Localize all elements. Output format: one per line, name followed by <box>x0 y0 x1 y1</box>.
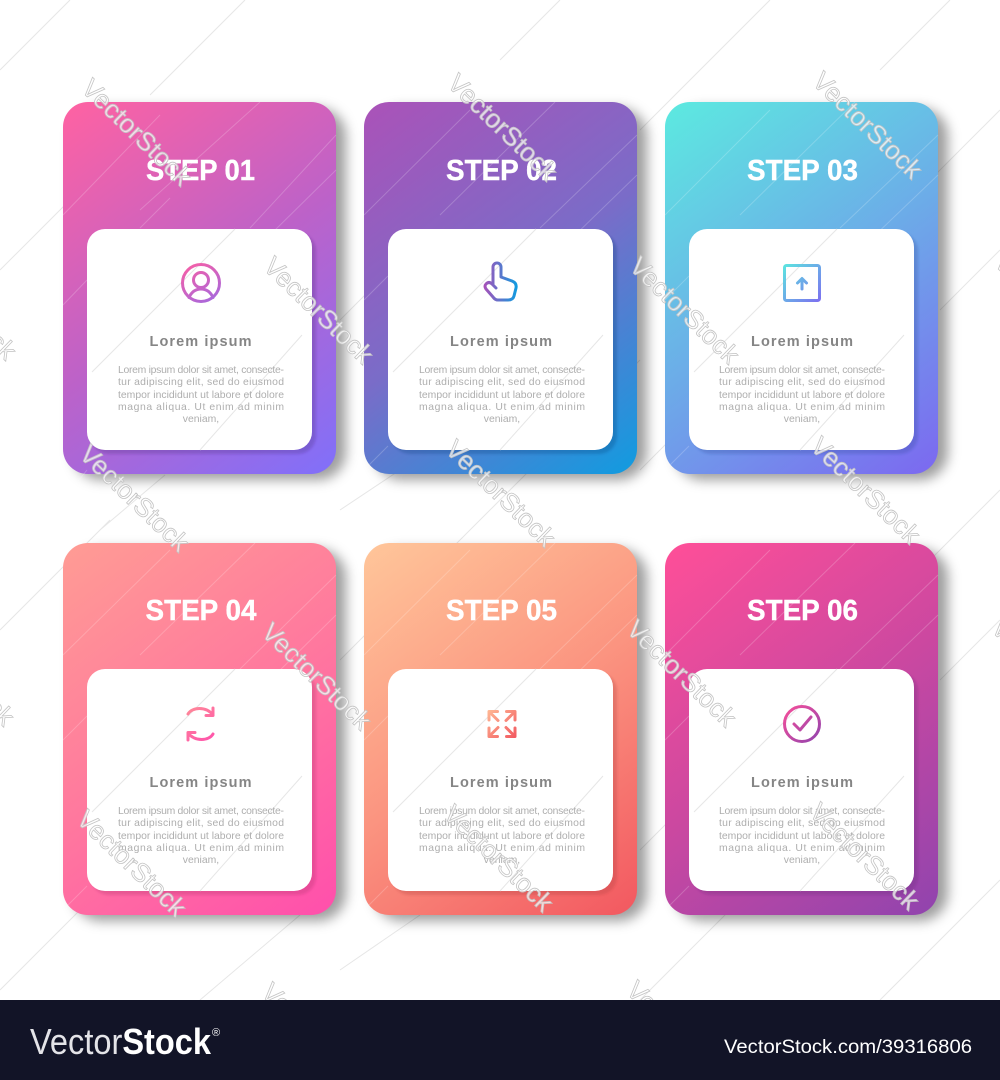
text: step 01 body <box>118 365 284 425</box>
text: step 01 title: Lorem ipsum <box>150 334 252 350</box>
text: step 04 title: Lorem ipsum <box>150 775 252 791</box>
text: step 03 body <box>719 365 885 425</box>
footer bar <box>0 1000 1000 1080</box>
registered mark: ® <box>212 1027 220 1039</box>
icon: pointing hand <box>485 263 516 300</box>
text: step 04 body: Lorem ipsum dolor sit amet, consecte- <box>118 806 284 817</box>
icon: check circle <box>784 706 820 742</box>
text: step 02 body: Lorem ipsum dolor sit amet, consecte- <box>419 365 585 376</box>
content card: step 03 <box>689 229 914 450</box>
text: step 04 body: veniam, <box>183 855 219 866</box>
watermarks: VectorStock <box>804 797 926 916</box>
watermarks: VectorStock <box>442 68 564 187</box>
text: step 05 body: Lorem ipsum dolor sit amet, consecte- <box>419 806 585 817</box>
footer logo: VectorStock <box>30 1021 212 1062</box>
heading: step 02: STEP 02 <box>446 155 557 187</box>
text: step 02 body: tur adipiscing elit, sed do eiusmod <box>419 377 585 388</box>
text: step 06 body <box>719 806 885 866</box>
text: step 05 body: tempor incididunt ut labore et dolore <box>419 831 585 842</box>
text: step 01 body: tempor incididunt ut labore et dolore <box>118 390 284 401</box>
text: step 01 body: veniam, <box>183 414 219 425</box>
panel: step 01 <box>63 102 336 500</box>
panel: step 03 <box>665 102 938 474</box>
watermarks: VectorStock <box>71 804 193 923</box>
watermarks: VectorStock <box>258 251 380 370</box>
icon: refresh arrows <box>188 708 213 740</box>
panel: step 02 <box>364 102 637 474</box>
panel: step 05 <box>364 543 637 915</box>
text: step 04 body <box>118 806 284 866</box>
text: step 06 title: Lorem ipsum <box>751 775 853 791</box>
text: step 03 body: tempor incididunt ut labore et dolore <box>719 390 885 401</box>
watermarks: VectorStock <box>807 66 929 185</box>
heading: step 01: STEP 01 <box>146 155 255 187</box>
panel: step 04 <box>63 543 336 915</box>
text: step 06 body: magna aliqua. Ut enim ad minim <box>719 843 885 854</box>
card shadows <box>73 108 948 921</box>
icon: user profile <box>182 264 220 302</box>
content card: step 02 <box>388 229 613 450</box>
watermarks: VectorStock <box>440 434 562 553</box>
content card: step 01 <box>87 229 312 450</box>
text: step 06 body: tempor incididunt ut labore et dolore <box>719 831 885 842</box>
content card: step 04 <box>87 669 312 891</box>
heading: step 05: STEP 05 <box>446 595 557 627</box>
text: step 05 body <box>419 806 585 866</box>
text: step 02 title: Lorem ipsum <box>450 334 552 350</box>
heading: step 04: STEP 04 <box>146 595 256 627</box>
watermarks: VectorStock <box>74 439 196 558</box>
text: step 04 body: tempor incididunt ut labore et dolore <box>118 831 284 842</box>
text: step 02 body: magna aliqua. Ut enim ad minim <box>419 402 585 413</box>
text: step 03 body: Lorem ipsum dolor sit amet, consecte- <box>719 365 885 376</box>
watermarks: VectorStock <box>621 614 743 733</box>
watermarks: VectorStock <box>805 431 927 550</box>
text: step 05 title: Lorem ipsum <box>450 775 552 791</box>
watermarks: VectorStock <box>76 73 198 192</box>
watermarks: VectorStock <box>256 617 378 736</box>
text: step 03 body: tur adipiscing elit, sed do eiusmod <box>719 377 885 388</box>
text: step 01 body: Lorem ipsum dolor sit amet, consecte- <box>118 365 284 376</box>
icon: expand arrows <box>489 712 515 736</box>
content card: step 05 <box>388 669 613 891</box>
text: step 04 body: tur adipiscing elit, sed do eiusmod <box>118 818 284 829</box>
text: step 01 body: magna aliqua. Ut enim ad minim <box>118 402 284 413</box>
text: step 03 body: magna aliqua. Ut enim ad minim <box>719 402 885 413</box>
panel: step 06 <box>665 543 938 915</box>
heading: step 03: STEP 03 <box>747 155 858 187</box>
text: step 04 body: magna aliqua. Ut enim ad minim <box>118 843 284 854</box>
text: step 05 body: tur adipiscing elit, sed do eiusmod <box>419 818 585 829</box>
text: step 03 title: Lorem ipsum <box>751 334 853 350</box>
text: step 02 body: tempor incididunt ut labore et dolore <box>419 390 585 401</box>
watermarks: VectorStock <box>624 251 746 370</box>
text: step 06 body: Lorem ipsum dolor sit amet, consecte- <box>719 806 885 817</box>
text: step 06 body: tur adipiscing elit, sed do eiusmod <box>719 818 885 829</box>
watermarks: VectorStock <box>438 799 560 918</box>
text: step 05 body: veniam, <box>484 855 520 866</box>
text: step 05 body: magna aliqua. Ut enim ad minim <box>419 843 585 854</box>
text: step 03 body: veniam, <box>784 414 820 425</box>
text: step 02 body: veniam, <box>484 414 520 425</box>
content card: step 06 <box>689 669 914 891</box>
icon: upload arrow in square <box>784 266 820 300</box>
text: step 06 body: veniam, <box>784 855 820 866</box>
footer url: VectorStock.com/39316806 <box>724 1037 972 1058</box>
heading: step 06: STEP 06 <box>747 595 858 627</box>
text: step 02 body <box>419 365 585 425</box>
text: step 01 body: tur adipiscing elit, sed do eiusmod <box>118 377 284 388</box>
